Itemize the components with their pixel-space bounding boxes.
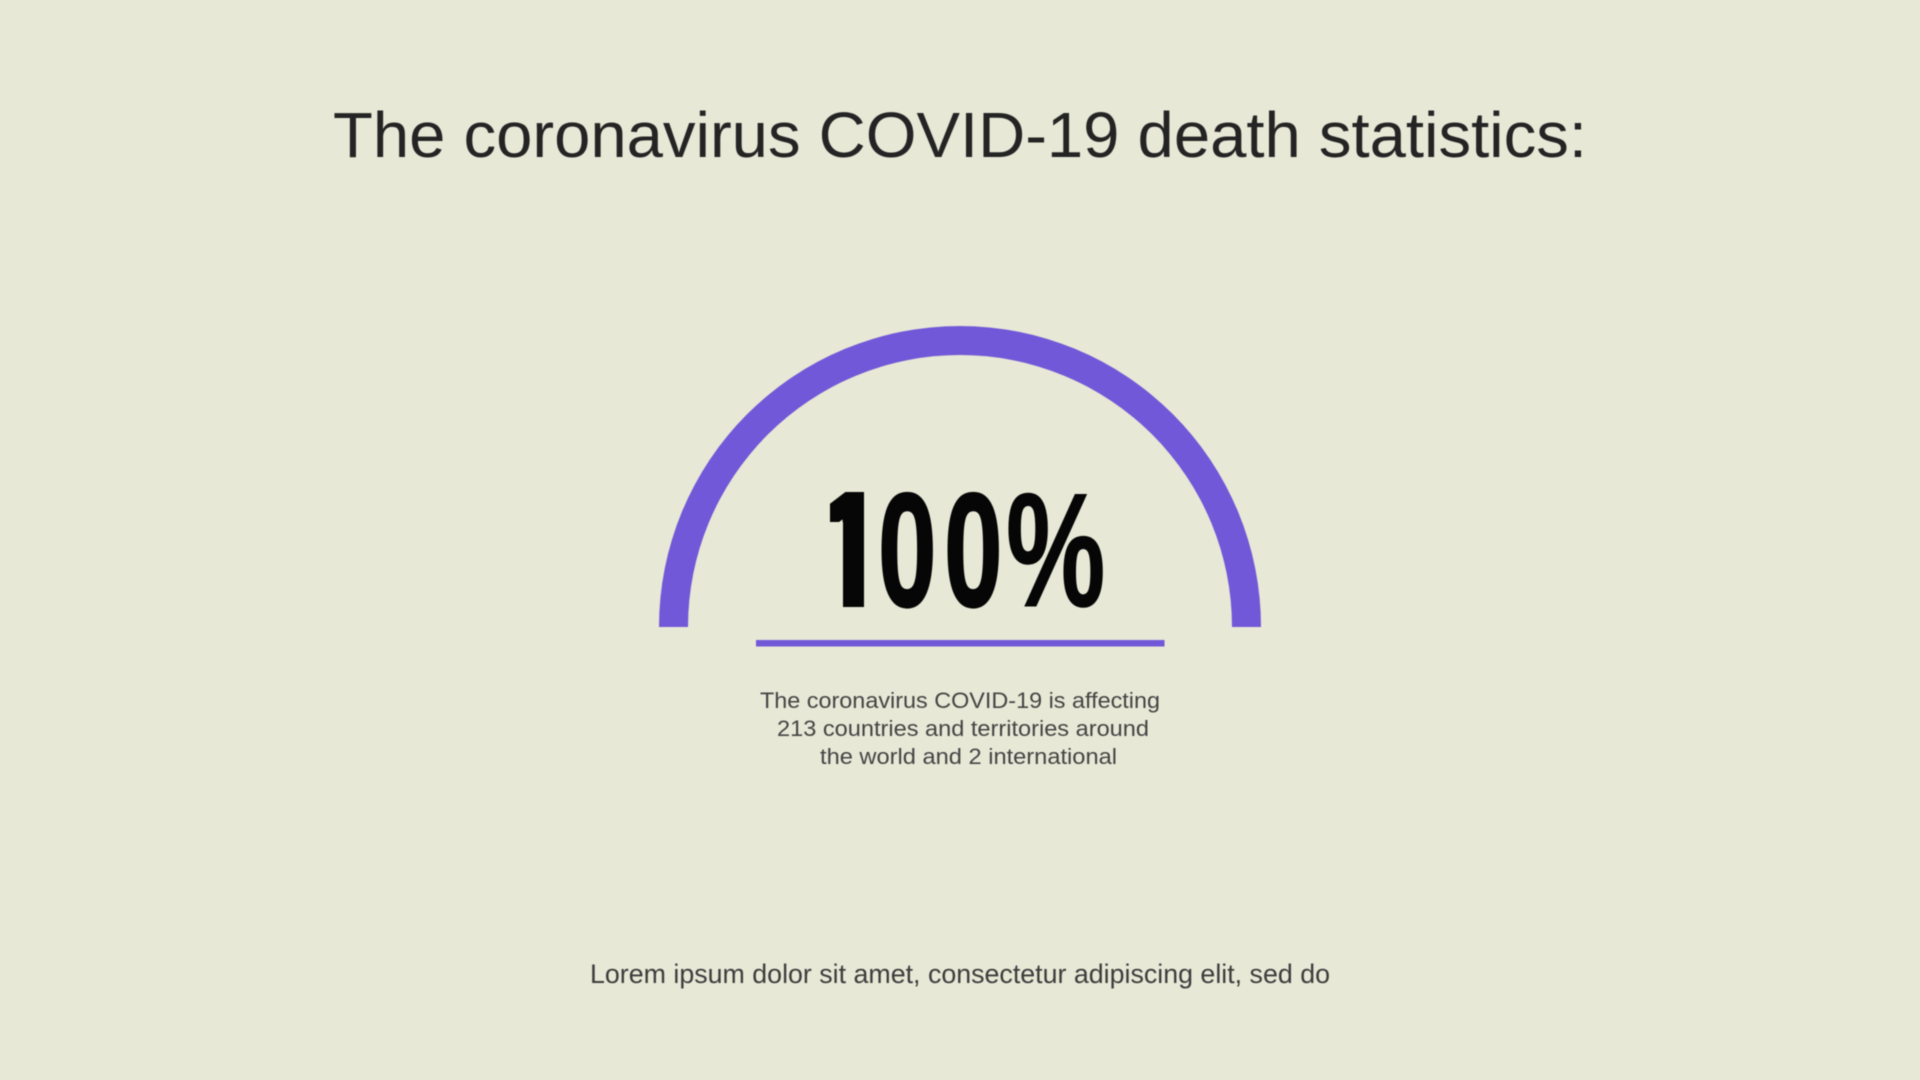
- big number: 100%: 0: [944, 459, 1003, 640]
- description text block: The coronavirus COVID-19 is affecting: [760, 688, 1160, 713]
- footer text: Lorem ipsum dolor sit amet, consectetur adipiscing elit, sed do: [590, 959, 1330, 989]
- description text block: 213 countries and territories around: [777, 716, 1149, 741]
- big number: 100%: [829, 491, 1104, 610]
- gauge chart: semicircle arc at 100%: [659, 326, 1261, 627]
- big number: 100%: 0: [878, 459, 937, 640]
- big number: 100%: %: [1006, 460, 1105, 641]
- title: The coronavirus COVID-19 death statistics:: [333, 99, 1587, 171]
- description text block: [760, 688, 1160, 769]
- divider line under number: [756, 640, 1164, 646]
- description text block: the world and 2 international: [820, 744, 1117, 769]
- big number: 100%: 1: [813, 460, 890, 641]
